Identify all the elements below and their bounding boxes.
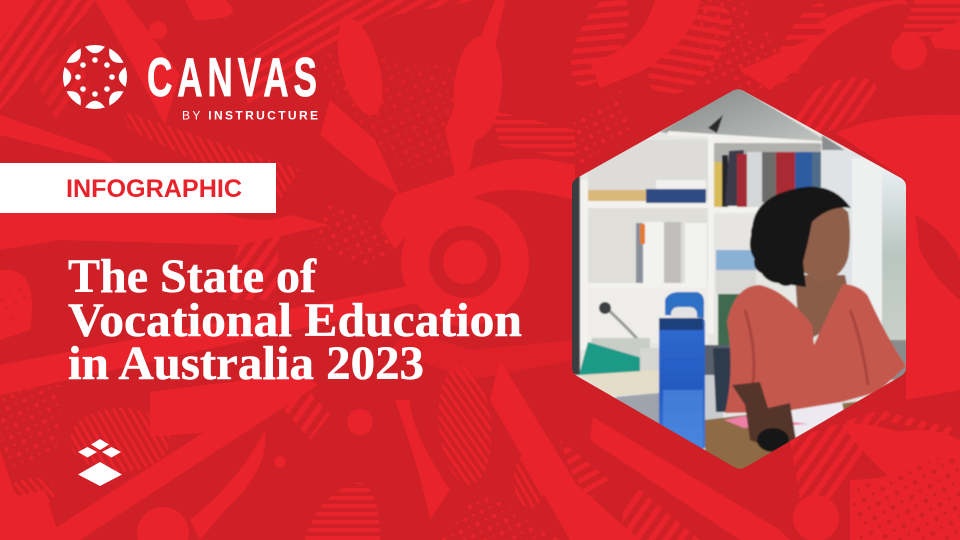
icon: Canvas ring [63, 45, 127, 109]
photo shelving [580, 115, 822, 350]
photo water bottle [659, 292, 705, 450]
photo binders [588, 150, 821, 365]
label: infographic tag: INFOGRAPHIC [66, 175, 242, 203]
Canvas logo [63, 45, 322, 122]
photo desk items [578, 301, 732, 424]
hexagon photo: woman working at desk [570, 85, 910, 475]
photo woman [725, 187, 906, 452]
photo desk surface and papers [705, 400, 870, 472]
title [68, 250, 522, 390]
title: in Australia 2023 [68, 337, 424, 390]
wordmark: by Instructure: BY INSTRUCTURE [182, 108, 318, 122]
title: The State of [68, 250, 317, 303]
photo wall and ceiling [570, 85, 910, 475]
wordmark: CANVAS: CANVAS [147, 46, 322, 108]
label: infographic tag [0, 163, 276, 213]
icon: Instructure diamonds [78, 439, 122, 486]
title: Vocational Education [68, 294, 522, 347]
